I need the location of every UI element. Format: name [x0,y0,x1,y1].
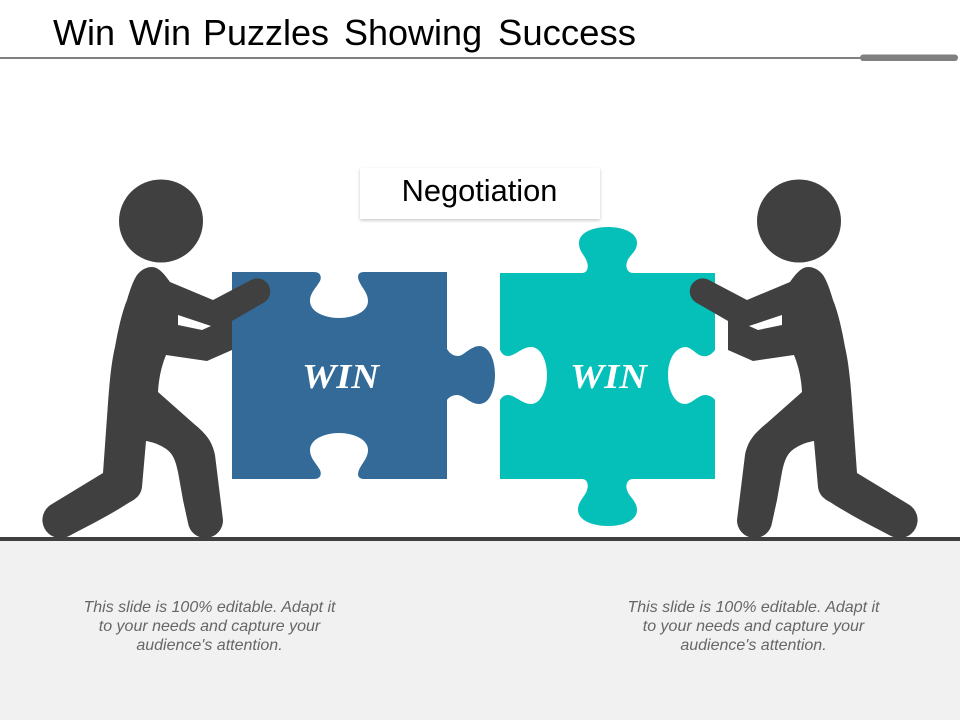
puzzle piece: teal WIN [500,227,715,526]
label box: Negotiation: Negotiation [402,173,557,208]
title: Showing [344,12,482,53]
figure: right person pushing [690,180,918,538]
title: Puzzles [203,12,329,53]
text block: left caption: to your needs and capture your [99,618,321,635]
text block: right caption: This slide is 100% editable. Adapt it [628,599,880,616]
text block: left caption: audience's attention. [136,637,283,654]
puzzle piece: blue WIN [232,272,495,479]
ground line [0,537,960,541]
figure: left person pushing [42,180,270,538]
footer panel [0,541,960,720]
label box: Negotiation [360,168,600,219]
header rule with pill accent [0,54,958,61]
text block: right caption: audience's attention. [680,637,827,654]
text block: left caption [84,599,336,654]
title: Success [498,12,636,53]
text block: left caption: This slide is 100% editable. Adapt it [84,599,336,616]
text block: right caption: to your needs and capture your [643,618,865,635]
text block: right caption [628,599,880,654]
title [53,12,636,53]
title: Win [129,12,191,53]
puzzle piece: teal WIN: WIN [570,357,649,396]
title: Win [53,12,115,53]
puzzle piece: blue WIN: WIN [302,357,381,396]
